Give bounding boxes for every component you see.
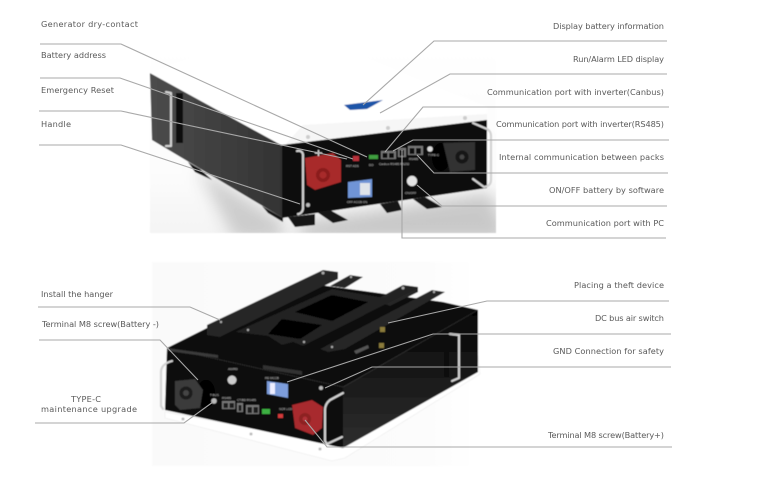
front handles <box>161 361 172 409</box>
screws <box>182 386 323 450</box>
labels: top right: Communication port with PC <box>546 218 664 228</box>
labels: bottom left: Terminal M8 screw(Battery -) <box>41 319 159 329</box>
printed port labels: AM/RD <box>228 367 238 371</box>
side panel <box>343 310 478 448</box>
printed port labels: Canbus RS485 RS232 <box>379 162 410 166</box>
ports <box>222 401 235 409</box>
rail holes <box>220 272 435 348</box>
printed port labels: RE MCCB <box>265 376 279 380</box>
labels: bottom right: GND Connection for safety <box>553 346 664 356</box>
white base plate <box>165 356 480 461</box>
leader lines <box>35 41 672 447</box>
side handle <box>444 335 449 377</box>
top battery illustration <box>149 72 496 234</box>
printed port labels <box>346 153 440 204</box>
labels: bottom left: Install the hanger <box>41 289 114 299</box>
labels: top left: Emergency Reset <box>41 85 115 95</box>
side panel <box>150 73 283 218</box>
side handle <box>176 93 183 143</box>
labels: bottom left <box>41 289 159 414</box>
printed port labels: RST ADS <box>346 164 359 168</box>
type-c and gnd screws <box>427 146 433 152</box>
blue air switch <box>348 179 372 198</box>
printed port labels: OFF ACCB ON <box>347 200 367 204</box>
labels: bottom left: maintenance upgrade <box>41 404 137 414</box>
plate windows <box>295 295 368 321</box>
labels: top right: Internal communication between packs <box>499 152 664 162</box>
labels: bottom right: Terminal M8 screw(Battery+) <box>547 430 664 440</box>
labels: top right: Run/Alarm LED display <box>573 54 664 64</box>
edge strips <box>167 348 218 358</box>
power button <box>228 376 236 384</box>
labels: top left: Battery address <box>41 50 106 60</box>
labels: top left <box>41 19 139 129</box>
theft-device studs <box>379 327 385 348</box>
blue switch <box>267 381 288 398</box>
printed port labels <box>210 367 293 411</box>
front panel <box>165 348 343 448</box>
printed port labels: TYPE-C <box>428 153 440 157</box>
dark negative terminal <box>432 143 450 171</box>
printed port labels: DO <box>369 163 374 167</box>
red and green indicators <box>353 156 359 161</box>
display panel <box>344 100 383 110</box>
top surface <box>167 285 478 387</box>
printed port labels: RS485 <box>409 157 419 161</box>
labels: top right: Communication port with inverter(RS485) <box>496 119 664 129</box>
labels: bottom right: DC bus air switch <box>595 313 664 323</box>
labels: bottom left: TYPE-C <box>70 394 101 404</box>
soft ground shadow <box>196 170 496 234</box>
dark terminal <box>197 380 215 408</box>
green and red indicators <box>262 409 270 414</box>
printed port labels: RS485 <box>222 396 232 400</box>
front panel <box>282 120 487 218</box>
labels: top left: Handle <box>41 119 71 129</box>
type-c screw <box>211 398 217 404</box>
printed port labels: CT/BD RS485 <box>237 398 256 402</box>
printed port labels: T-BUS <box>210 393 219 397</box>
labels: top right: ON/OFF battery by software <box>549 185 664 195</box>
red terminal <box>292 400 323 435</box>
labels: bottom right <box>547 280 664 440</box>
labels: top right: Communication port with inverter(Canbus) <box>487 87 664 97</box>
power button <box>407 176 417 186</box>
printed port labels: ON/OFF <box>405 191 416 195</box>
front handles <box>297 151 303 214</box>
labels: top right: Display battery information <box>553 21 664 31</box>
port blocks <box>381 151 396 159</box>
hanger rails <box>207 270 445 352</box>
panel screws <box>306 116 467 139</box>
red positive terminal <box>305 153 341 190</box>
labels: top left: Generator dry-contact <box>41 19 139 29</box>
centre plate <box>235 286 418 346</box>
labels: bottom right: Placing a theft device <box>574 280 664 290</box>
labels: top right <box>487 21 664 228</box>
mounting feet <box>188 162 442 227</box>
top cover <box>150 40 487 146</box>
printed port labels: SCR LCD <box>279 407 293 411</box>
bottom battery illustration <box>152 262 482 466</box>
